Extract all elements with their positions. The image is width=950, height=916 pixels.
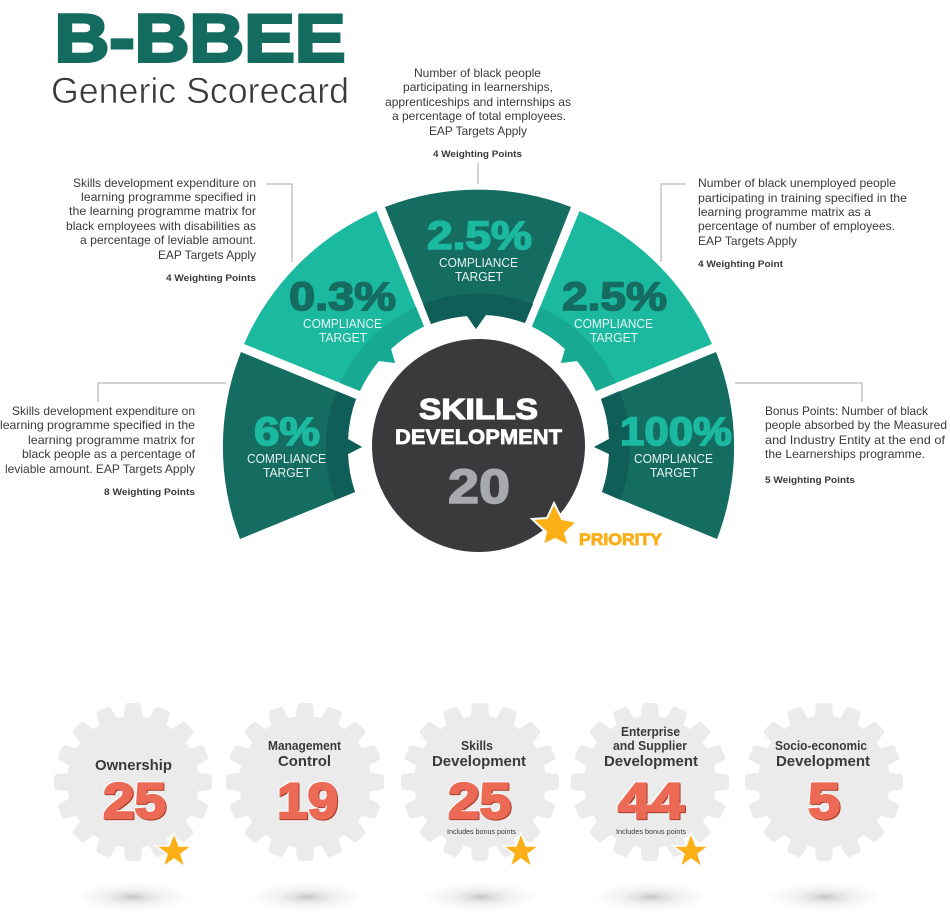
text block: upper right unemployed: Number of black unemployed people bbox=[698, 176, 896, 190]
gear: Management Control: 19 bbox=[277, 773, 338, 829]
gear: Skills Development: Development bbox=[432, 753, 526, 770]
text block: top learnerships bbox=[385, 66, 571, 160]
panel: top wedge 2.5% bbox=[385, 190, 571, 329]
panel: top wedge 2.5%: COMPLIANCE bbox=[439, 256, 518, 270]
panel: centre circle bbox=[372, 339, 585, 552]
gear: Enterprise and Supplier Development: 44 bbox=[618, 773, 684, 829]
text block: upper right unemployed: EAP Targets Apply bbox=[698, 234, 797, 248]
text block: lower right bonus points: people absorbed by the Measured bbox=[765, 418, 947, 432]
gear: Enterprise and Supplier Development: Includes bonus points bbox=[616, 827, 686, 836]
gear: Skills Development: Includes bonus points bbox=[447, 827, 516, 836]
gear: Socio-economic Development bbox=[745, 703, 903, 912]
gear: Ownership: Ownership bbox=[95, 757, 172, 774]
panel: top wedge 2.5%: 2.5% bbox=[427, 214, 532, 258]
text block: upper right unemployed bbox=[698, 176, 907, 270]
panel: upper left wedge 0.3%: TARGET bbox=[319, 331, 367, 345]
text block: lower left expenditure: black people as a percentage of bbox=[22, 447, 196, 461]
text block: upper left disabilities: a percentage of leviable amount. bbox=[80, 233, 256, 247]
gear: Management Control: Management bbox=[268, 739, 342, 753]
text block: lower right bonus points: 5 Weighting Points bbox=[765, 475, 855, 486]
text block: lower left expenditure: Skills development expenditure on bbox=[12, 404, 195, 418]
gear: Socio-economic Development: Development bbox=[776, 753, 870, 770]
title: Generic Scorecard bbox=[51, 70, 349, 111]
panel: upper right wedge 2.5%: COMPLIANCE bbox=[574, 317, 653, 331]
panel: centre circle: SKILLS bbox=[419, 394, 538, 426]
text block: top learnerships: apprenticeships and internships as bbox=[385, 95, 571, 109]
gear: Management Control: Control bbox=[278, 753, 331, 770]
text block: top learnerships: 4 Weighting Points bbox=[433, 149, 522, 160]
panel: upper left wedge 0.3%: COMPLIANCE bbox=[303, 317, 382, 331]
text block: lower left expenditure: learning programme matrix for bbox=[28, 433, 195, 447]
panel: top wedge 2.5%: TARGET bbox=[455, 270, 503, 284]
gear: Management Control bbox=[226, 703, 384, 912]
gear: Ownership bbox=[54, 703, 212, 912]
gear: Socio-economic Development: Socio-economic bbox=[775, 739, 867, 753]
text block: top learnerships: a percentage of total employees. bbox=[392, 109, 566, 123]
panel: far right wedge 100%: TARGET bbox=[650, 466, 698, 480]
gear: Ownership: 25 bbox=[103, 773, 166, 829]
panel: far left wedge 6% bbox=[223, 352, 362, 539]
text block: lower left expenditure: 8 Weighting Points bbox=[104, 487, 195, 498]
panel: far right wedge 100% bbox=[594, 352, 734, 539]
gear: Skills Development: Skills bbox=[461, 739, 493, 753]
text block: lower left expenditure: leviable amount. EAP Targets Apply bbox=[5, 462, 195, 476]
panel: far left wedge 6%: 6% bbox=[254, 410, 320, 454]
text block: upper left disabilities: learning programme specified in bbox=[81, 190, 256, 204]
text block: lower right bonus points: the Learnerships programme. bbox=[765, 447, 925, 461]
gear: Skills Development: 25 bbox=[448, 773, 511, 829]
text block: lower right bonus points: and Industry Entity at the end of bbox=[765, 433, 946, 447]
panel: far right wedge 100%: 100% bbox=[620, 410, 732, 454]
gear: Enterprise and Supplier Development: Development bbox=[604, 753, 698, 770]
title: B-BBEE bbox=[54, 0, 346, 76]
panel: upper left wedge 0.3% bbox=[244, 211, 424, 391]
text block: lower left expenditure bbox=[0, 404, 196, 498]
icon: priority star bbox=[532, 503, 577, 546]
text block: top learnerships: participating in learnerships, bbox=[403, 80, 553, 94]
text block: upper left disabilities: Skills development expenditure on bbox=[73, 176, 256, 190]
panel: upper right wedge 2.5%: 2.5% bbox=[562, 275, 667, 319]
text block: upper left disabilities: the learning programme matrix for bbox=[69, 204, 256, 218]
panel: upper right wedge 2.5%: TARGET bbox=[590, 331, 638, 345]
panel: centre circle: 20 bbox=[448, 461, 510, 514]
panel: upper left wedge 0.3%: 0.3% bbox=[289, 275, 396, 319]
text block: lower left expenditure: learning programme specified in the bbox=[0, 418, 195, 432]
panel: far right wedge 100%: COMPLIANCE bbox=[634, 452, 713, 466]
priority label: PRIORITY bbox=[579, 531, 662, 549]
gear: Socio-economic Development: 5 bbox=[808, 773, 840, 829]
text block: upper left disabilities: black employees with disabilities as bbox=[66, 219, 256, 233]
gear: Enterprise and Supplier Development: Enterprise bbox=[621, 725, 680, 739]
text block: upper right unemployed: participating in training specified in the bbox=[698, 191, 907, 205]
text block: upper right unemployed: learning programme matrix as a bbox=[698, 205, 871, 219]
panel: far left wedge 6%: COMPLIANCE bbox=[247, 452, 326, 466]
text block: top learnerships: EAP Targets Apply bbox=[429, 124, 527, 138]
text block: lower right bonus points bbox=[765, 404, 947, 486]
text block: upper right unemployed: 4 Weighting Point bbox=[698, 259, 784, 270]
text block: upper left disabilities bbox=[66, 176, 256, 284]
gear: Skills Development bbox=[401, 703, 559, 912]
text block: top learnerships: Number of black people bbox=[414, 66, 541, 80]
panel: upper right wedge 2.5% bbox=[532, 211, 712, 391]
gear: Enterprise and Supplier Development bbox=[571, 703, 729, 912]
text block: upper left disabilities: EAP Targets Apply bbox=[158, 248, 256, 262]
panel: far left wedge 6%: TARGET bbox=[263, 466, 311, 480]
text block: upper right unemployed: percentage of number of employees. bbox=[698, 219, 895, 233]
title bbox=[51, 0, 349, 111]
gear: Enterprise and Supplier Development: and Supplier bbox=[613, 739, 687, 753]
text block: lower right bonus points: Bonus Points: Number of black bbox=[765, 404, 929, 418]
text block: upper left disabilities: 4 Weighting Points bbox=[166, 273, 256, 284]
panel: centre circle: DEVELOPMENT bbox=[395, 426, 562, 449]
